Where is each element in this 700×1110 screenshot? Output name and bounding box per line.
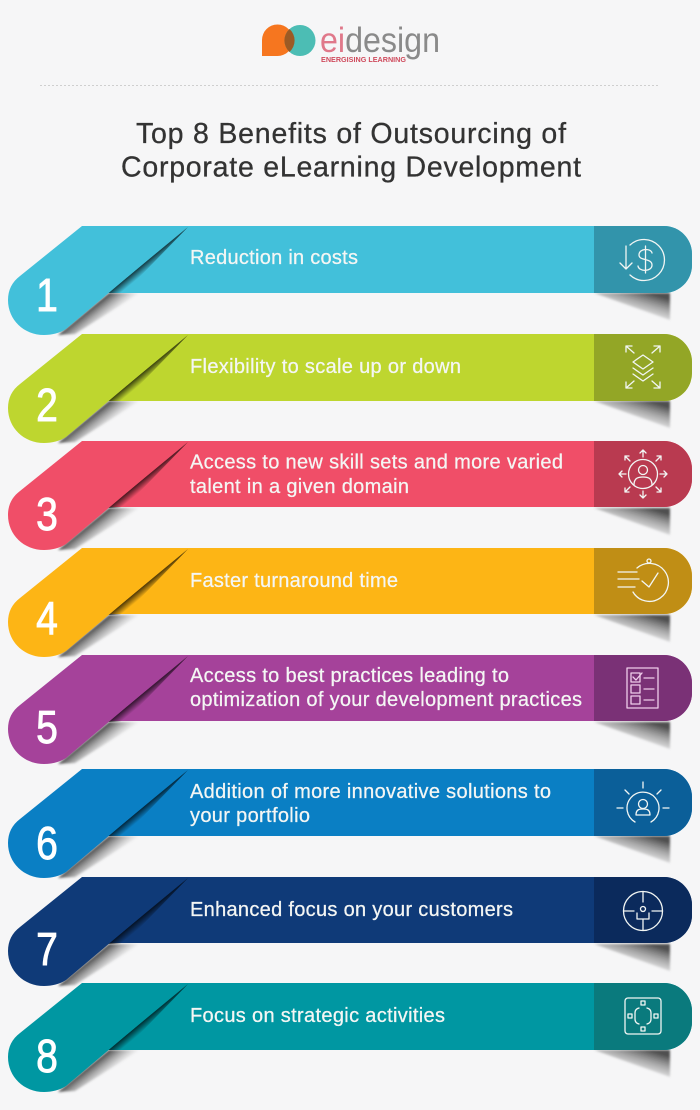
icon: person with rays — [617, 782, 669, 822]
number tab — [8, 877, 188, 986]
number tab — [8, 226, 188, 335]
ribbon 5: optimization of your development practices — [190, 689, 582, 711]
title: Top 8 Benefits of Outsourcing of — [136, 118, 566, 150]
ribbon 4 — [8, 548, 692, 657]
icon panel — [594, 548, 692, 614]
number tab — [8, 983, 188, 1092]
icon panel — [594, 226, 692, 293]
ribbon 7 — [8, 877, 692, 986]
ribbon 1 — [8, 226, 692, 335]
ribbon 5 — [8, 655, 692, 764]
number: 2 — [36, 380, 58, 432]
icon panel — [594, 877, 692, 943]
number tab — [8, 548, 188, 657]
label: Focus on strategic activities — [190, 1005, 445, 1027]
icon: stopwatch check — [618, 559, 668, 601]
number: 4 — [36, 593, 58, 645]
ribbon 6: your portfolio — [190, 805, 310, 827]
logo tagline: ENERGISING LEARNING — [321, 55, 406, 64]
number: 7 — [36, 924, 58, 976]
ribbon 3 — [8, 441, 692, 550]
ribbon 3: talent in a given domain — [190, 476, 409, 498]
label: Addition of more innovative solutions to — [190, 781, 551, 803]
icon panel — [594, 655, 692, 721]
icon: layers expand — [626, 346, 660, 388]
band — [82, 655, 692, 721]
band — [82, 226, 692, 293]
icon panel — [594, 334, 692, 401]
icon: dollar down — [620, 240, 664, 280]
band — [82, 441, 692, 507]
band — [82, 548, 692, 614]
label: Faster turnaround time — [190, 570, 398, 592]
band — [82, 877, 692, 943]
logo wordmark: eidesign — [320, 21, 440, 60]
number: 8 — [36, 1031, 58, 1083]
band — [82, 769, 692, 836]
title — [121, 118, 581, 184]
label: Reduction in costs — [190, 247, 358, 269]
band — [82, 983, 692, 1050]
icon panel — [594, 769, 692, 836]
icon: checklist — [627, 668, 658, 708]
number tab — [8, 334, 188, 443]
number: 1 — [36, 270, 58, 322]
icon: person with arrows — [619, 450, 667, 498]
number tab — [8, 655, 188, 764]
logo mark — [262, 24, 316, 56]
label: Flexibility to scale up or down — [190, 356, 461, 378]
label: Access to new skill sets and more varied — [190, 452, 563, 474]
number: 3 — [36, 489, 58, 541]
ribbon 6 — [8, 769, 692, 878]
icon: framed brackets — [625, 998, 661, 1034]
icon panel — [594, 441, 692, 507]
label: Access to best practices leading to — [190, 665, 509, 687]
number tab — [8, 769, 188, 878]
icon panel — [594, 983, 692, 1050]
number: 6 — [36, 818, 58, 870]
band — [82, 334, 692, 401]
label: Enhanced focus on your customers — [190, 899, 513, 921]
icon: target person — [624, 892, 662, 930]
number: 5 — [36, 702, 58, 754]
ribbon 8 — [8, 983, 692, 1092]
title: Corporate eLearning Development — [121, 152, 581, 184]
number tab — [8, 441, 188, 550]
logo — [262, 21, 440, 64]
ribbon 2 — [8, 334, 692, 443]
